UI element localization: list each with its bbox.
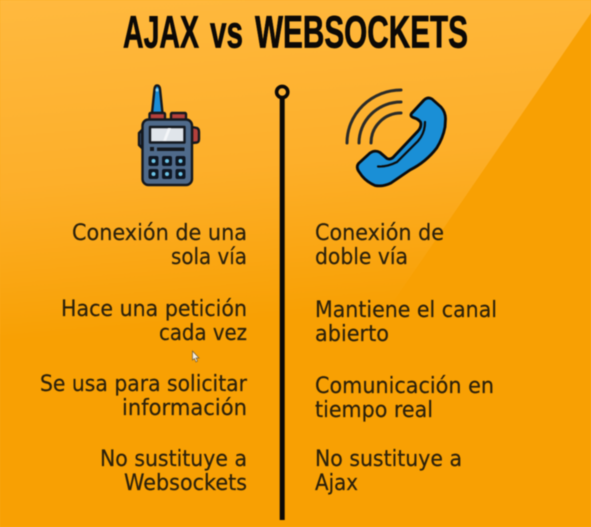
text: left item 2 [61, 296, 247, 346]
text: right item 2 [315, 297, 497, 347]
text: right item 4: Ajax [315, 470, 358, 496]
text: left item 3: información [122, 395, 247, 421]
text: left item 1: sola vía [171, 244, 247, 270]
text: right item 4 [315, 446, 462, 496]
title: AJAX [123, 7, 199, 58]
text: right item 2: abierto [315, 321, 389, 347]
text: left item 4: No sustituye a [100, 446, 247, 472]
text: right item 1: Conexión de [315, 220, 444, 246]
text: right item 3: tiempo real [315, 397, 433, 423]
text: left item 3 [40, 371, 248, 421]
icon: mouse cursor [192, 351, 199, 362]
icon: walkie-talkie [139, 86, 199, 185]
text: left item 3: Se usa para solicitar [40, 371, 248, 397]
text: left item 4: Websockets [124, 470, 247, 496]
text: right item 1 [315, 220, 444, 270]
text: right item 3 [315, 373, 494, 423]
text: left item 1 [72, 220, 247, 270]
text: left item 4 [100, 446, 247, 496]
text: left item 2: Hace una petición [61, 296, 247, 322]
title: vs [210, 7, 243, 58]
text: left item 2: cada vez [159, 320, 247, 346]
text: right item 1: doble vía [315, 244, 408, 270]
text: left item 1: Conexión de una [72, 220, 247, 246]
text: right item 2: Mantiene el canal [315, 297, 497, 323]
title [123, 7, 468, 58]
central divider line [277, 86, 288, 520]
title: WEBSOCKETS [255, 7, 468, 58]
text: right item 3: Comunicación en [315, 373, 494, 399]
text: right item 4: No sustituye a [315, 446, 462, 472]
icon: telephone [347, 90, 446, 186]
